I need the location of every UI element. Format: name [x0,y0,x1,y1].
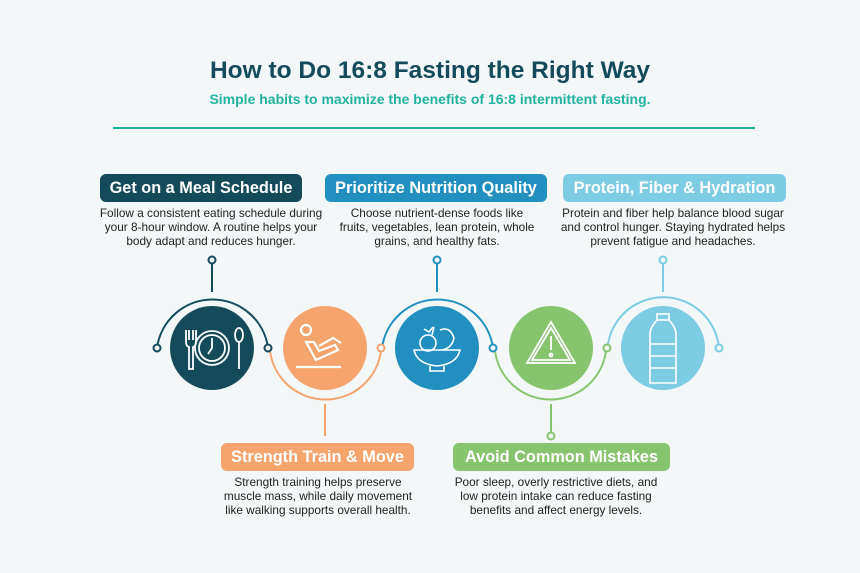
tag: nutrition: Prioritize Nutrition Quality [335,179,537,197]
connector: mistakes [495,351,606,440]
text: protein: Protein and fiber help balance blood sugar [562,206,784,220]
text: strength [224,475,412,517]
tag: mistakes: Avoid Common Mistakes [465,448,658,466]
text: mistakes: benefits and affect energy levels. [470,503,642,517]
divider [113,127,755,128]
icon: water bottle [621,306,705,390]
text: strength: Strength training helps preserve [234,475,402,489]
tag: meal schedule: Get on a Meal Schedule [110,179,292,197]
text: meal schedule [100,206,322,248]
tag: nutrition [325,174,547,202]
tag: mistakes [453,443,670,471]
connector: nutrition [382,256,493,348]
connector: strength [270,351,381,436]
text: mistakes: Poor sleep, overly restrictive diets, and [455,475,657,489]
text: nutrition: grains, and healthy fats. [374,234,500,248]
text: strength: like walking supports overall health. [225,503,411,517]
icon: plate clock [170,306,254,390]
tag: strength [221,443,414,471]
text: protein: and control hunger. Staying hydrated helps [561,220,785,234]
text: nutrition: Choose nutrient-dense foods like [351,206,523,220]
tag: strength: Strength Train & Move [231,448,404,466]
tag: protein: Protein, Fiber & Hydration [574,179,775,197]
text: nutrition [340,206,534,248]
text: nutrition: fruits, vegetables, lean protein, whole [340,220,534,234]
subtitle: Simple habits to maximize the benefits of 16:8 intermittent fasting. [209,91,651,107]
connector: meal [154,256,268,352]
text: mistakes: low protein intake can reduce fasting [460,489,652,503]
text: meal schedule: your 8-hour window. A routine helps your [105,220,317,234]
text: protein: prevent fatigue and headaches. [590,234,756,248]
text: meal schedule: Follow a consistent eating schedule during [100,206,322,220]
title: How to Do 16:8 Fasting the Right Way [210,57,650,84]
tag: meal schedule [100,174,302,202]
tag: protein [563,174,786,202]
text: meal schedule: body adapt and reduces hunger. [126,234,296,248]
text: strength: muscle mass, while daily movement [224,489,412,503]
icon: fruit bowl [395,306,479,390]
text: mistakes [455,475,657,517]
connector: hydration [608,256,722,352]
icon: exercise [283,306,367,390]
icon: warning [509,306,593,390]
text: protein [561,206,785,248]
